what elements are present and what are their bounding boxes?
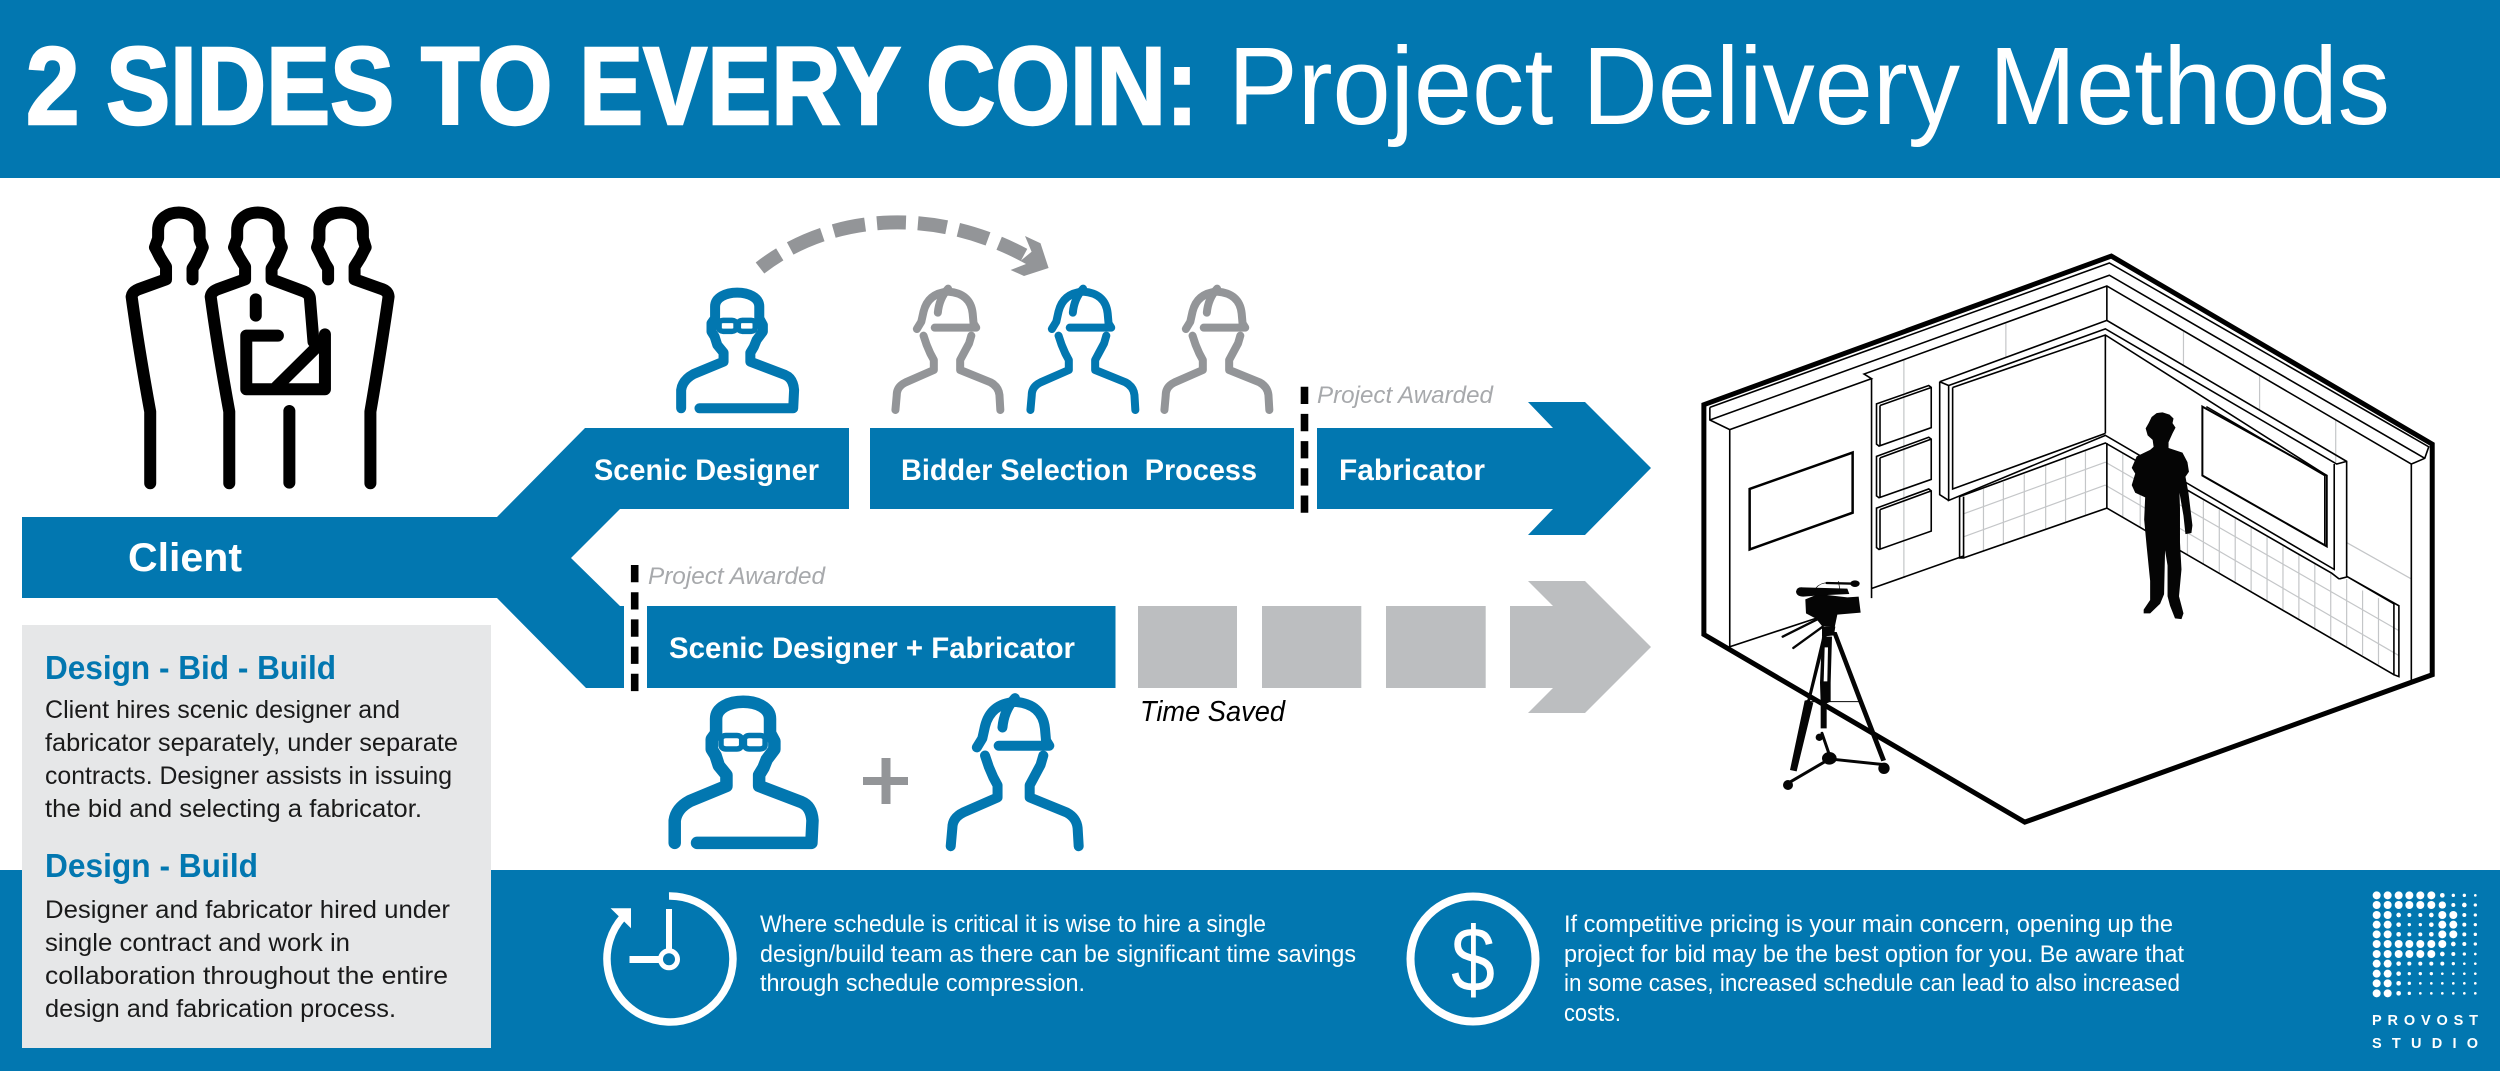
text: pricing note: in some cases, increased schedule can lead to also increased xyxy=(1564,970,2180,997)
text: pricing note xyxy=(1564,911,2184,1027)
icon: dollar coin: $ xyxy=(1451,909,1495,1011)
footer band xyxy=(0,870,2500,1071)
heading: design bid build: Design - Bid - Build xyxy=(45,649,336,686)
arrow: fabricator: Fabricator xyxy=(1339,454,1485,487)
icon: dollar coin xyxy=(1410,896,1536,1022)
icon: scenic designer large xyxy=(675,702,812,843)
title: 2 SIDES TO EVERY COIN: xyxy=(26,25,1198,148)
gray wall seams and tiles xyxy=(1904,322,2411,664)
silhouette: video camera on tripod xyxy=(1783,580,1890,790)
icon: scenic designer small xyxy=(681,293,794,408)
illustration: isometric studio set xyxy=(1704,256,2432,822)
bar: scenic designer + fabricator xyxy=(647,606,1116,688)
text: design bid build description: the bid and selecting a fabricator. xyxy=(45,795,422,823)
label: scenic designer: Scenic Designer xyxy=(594,454,819,487)
text: design bid build description: fabricator separately, under separate xyxy=(45,729,458,757)
header band xyxy=(0,0,2500,178)
marker: project awarded, bottom: Project Awarded xyxy=(648,563,826,590)
icon: plus xyxy=(863,758,908,804)
text: schedule note: Where schedule is critical it is wise to hire a single xyxy=(760,911,1266,938)
right-wall panel xyxy=(2202,407,2327,546)
large upper window frame xyxy=(1940,320,2347,579)
text: design bid build description: Client hires scenic designer and xyxy=(45,696,400,724)
title xyxy=(26,25,2390,148)
bar: bidder selection process xyxy=(870,428,1294,509)
text: design build description: single contract and work in xyxy=(45,929,350,957)
text: schedule note xyxy=(760,911,1356,997)
label: time saved: Time Saved xyxy=(1140,696,1286,728)
camera body xyxy=(1805,594,1861,627)
text: design build description: design and fabrication process. xyxy=(45,995,396,1023)
text: design build description: Designer and fabricator hired under xyxy=(45,896,450,924)
icon: bidder selected xyxy=(1030,289,1135,410)
bar: bidder selection process: Bidder Selection Process xyxy=(901,454,1257,487)
arrow: client fork with scenic designer branch xyxy=(22,428,849,688)
icon: bidder right xyxy=(1164,289,1269,410)
pan handles xyxy=(1783,619,1823,648)
cornice and wall lines xyxy=(1710,263,2429,680)
text: schedule note: through schedule compression. xyxy=(760,970,1085,997)
outer floor and wall outline xyxy=(1704,256,2432,822)
logo: provost studio xyxy=(2372,891,2478,1052)
arrow: time saved blocks xyxy=(1138,581,1651,713)
marker: project awarded, top: Project Awarded xyxy=(1317,382,1494,409)
text: design build description: collaboration throughout the entire xyxy=(45,962,448,990)
silhouette: person xyxy=(2132,412,2192,619)
text: design build description xyxy=(45,896,450,1023)
text: pricing note: costs. xyxy=(1564,1000,1621,1027)
text: design bid build description: contracts. Designer assists in issuing xyxy=(45,762,452,790)
arrow: fabricator xyxy=(1317,402,1651,535)
icon: clock xyxy=(607,896,733,1022)
text: pricing note: project for bid may be the best option for you. Be aware that xyxy=(1564,941,2184,968)
bar: scenic designer + fabricator: Scenic Designer + Fabricator xyxy=(669,632,1075,665)
logo wordmark: STUDIO xyxy=(2372,1036,2478,1052)
tripod head and legs xyxy=(1822,627,1835,637)
dolly base xyxy=(1822,752,1837,765)
arrow: dashed selection curve xyxy=(760,222,1049,276)
icon: client group xyxy=(132,212,389,483)
text: schedule note: design/build team as there can be significant time savings xyxy=(760,941,1356,968)
label: client: Client xyxy=(128,536,242,580)
logo wordmark xyxy=(2372,1013,2478,1052)
heading: design build: Design - Build xyxy=(45,847,258,884)
left-wall panel xyxy=(1750,453,1853,549)
title: Project Delivery Methods xyxy=(1228,25,2390,148)
icon: bidder left xyxy=(895,289,1000,410)
panel: method definitions xyxy=(22,625,491,1048)
logo wordmark: PROVOST xyxy=(2372,1013,2478,1029)
small frames xyxy=(1877,386,1931,446)
icon: fabricator large xyxy=(951,698,1079,846)
text: design bid build description xyxy=(45,696,458,823)
text: pricing note: If competitive pricing is your main concern, opening up the xyxy=(1564,911,2173,938)
